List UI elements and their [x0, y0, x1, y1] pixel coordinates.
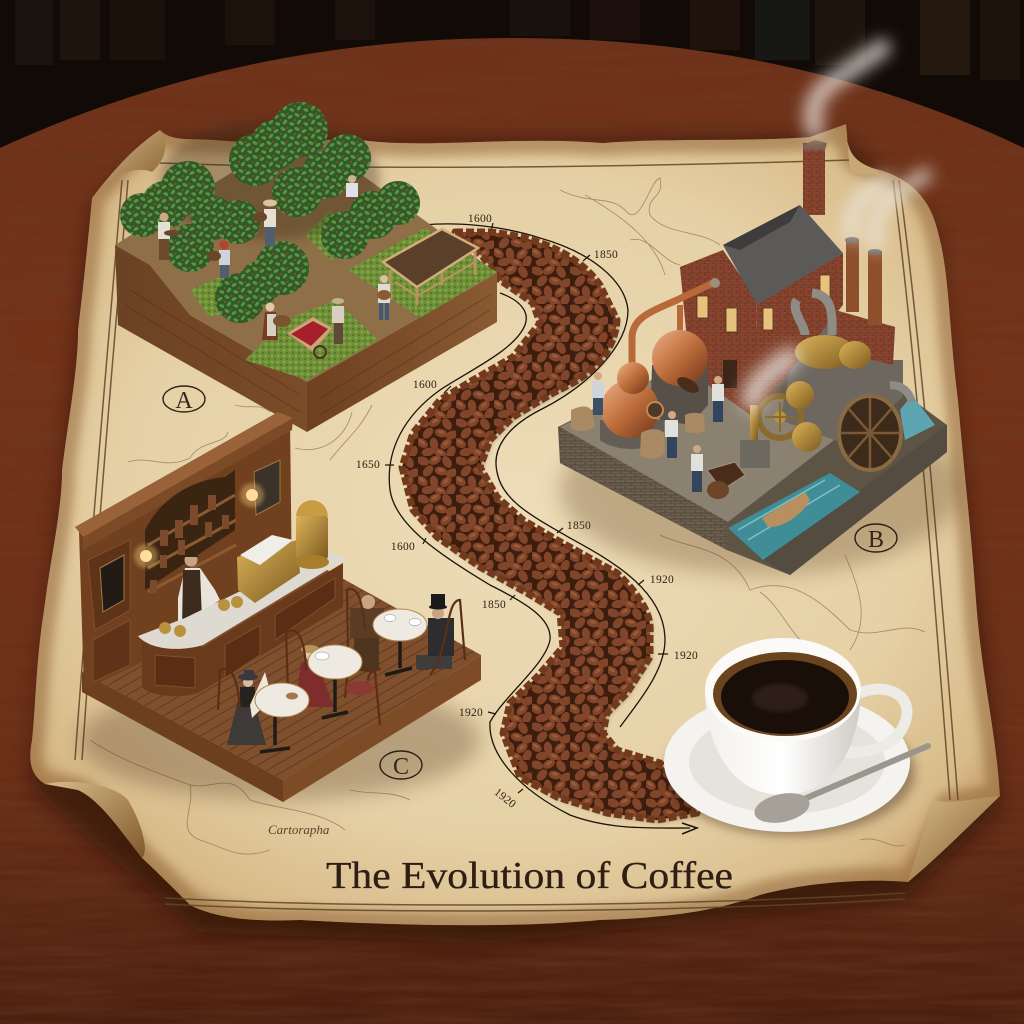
parchment map sheet [30, 124, 1000, 925]
coffee bean river [402, 232, 699, 823]
timeline route with date markers: 1920 [650, 574, 674, 586]
timeline route with date markers: 1850 [594, 249, 618, 261]
factory: stone base [558, 310, 947, 575]
parchment double border lines [75, 160, 958, 911]
coffee cup on saucer [664, 638, 928, 836]
plantation: wheelbarrow of red cherries [287, 317, 333, 358]
timeline route with date markers: 1920 [459, 707, 483, 719]
map label: Cartorapha: Cartorapha [268, 822, 330, 837]
timeline route with date markers: 1600 [468, 213, 492, 225]
factory: boat [762, 492, 810, 527]
factory: workers and roaster tray [592, 372, 745, 499]
cup: saucer [664, 692, 915, 836]
plantation: coffee bushes [120, 102, 420, 323]
plantation: soil and grass top [115, 130, 497, 382]
label A [163, 386, 205, 414]
factory: rear block and chimney stacks [780, 237, 903, 445]
factory: water channel [728, 395, 935, 560]
plantation: workers [158, 175, 391, 344]
factory: gears and steam engine [740, 293, 871, 468]
spoon [752, 746, 928, 828]
factory: steam clouds [752, 48, 925, 400]
timeline route with date markers: 1600 [413, 379, 437, 391]
curled corner: top left [92, 130, 165, 198]
background: bookshelf [0, 0, 1024, 160]
curled corner: bottom left [45, 782, 145, 858]
section A: coffee plantation diorama [115, 102, 497, 432]
factory: shadow [560, 405, 960, 575]
curled corner: bottom right [908, 796, 1000, 882]
factory: water wheel [839, 385, 912, 470]
label A: A [175, 388, 193, 414]
label C [380, 751, 422, 780]
cafe: shadow [80, 680, 480, 800]
cup: handle [845, 689, 907, 753]
timeline route with date markers: 1920 [492, 786, 518, 811]
curled corner: top right [846, 124, 878, 175]
parchment shadow [30, 138, 1000, 943]
coffee surface [713, 652, 857, 736]
timeline route with date markers: 1920 [674, 650, 698, 662]
factory: brick building [680, 140, 843, 417]
plantation: drying tray [383, 229, 478, 305]
cafe: golden cup warmer and urn [237, 500, 329, 603]
cafe: bar counter with marble top [138, 550, 347, 696]
cup: body [705, 690, 861, 795]
factory: copper stills and pipes [600, 278, 720, 449]
label C: C [393, 754, 409, 780]
section B: industrial factory diorama [558, 48, 960, 575]
timeline route with date markers: 1850 [567, 520, 591, 532]
title: The Evolution of Coffee [326, 855, 733, 897]
cafe: back wall with shelves [75, 412, 293, 690]
plantation: wooden block [115, 245, 497, 432]
cup: rim [705, 638, 861, 742]
label B [855, 524, 897, 553]
cafe: wooden platform [82, 555, 481, 802]
timeline route with date markers: 1600 [391, 541, 415, 553]
timeline route with date markers: 1650 [356, 459, 380, 471]
timeline route with date markers [356, 213, 698, 834]
section C: historic coffeehouse diorama [75, 412, 481, 802]
map: faint geography lines [90, 178, 925, 854]
factory: grain sacks [571, 406, 705, 459]
cafe: barman [178, 552, 220, 628]
timeline route with date markers: 1850 [482, 599, 506, 611]
label B: B [868, 527, 884, 553]
cafe: patrons, chairs and tables [218, 589, 465, 752]
